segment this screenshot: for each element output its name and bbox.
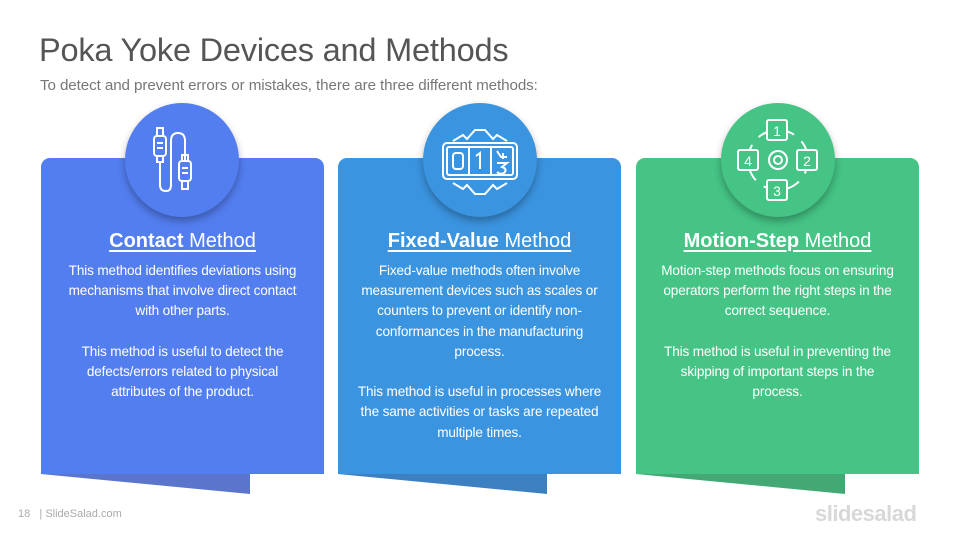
panel: motion-step method [636,158,919,474]
text: motion-step: Motion-step methods focus on ensuring operators perform the right steps in the correct sequence. [661,263,894,318]
panel: contact method [41,158,324,474]
fold: motion-step [636,474,845,494]
title: Poka Yoke Devices and Methods [39,32,508,68]
subtitle: To detect and prevent errors or mistakes, there are three different methods: [40,77,538,94]
footer: 18 | SlideSalad.com [18,508,122,520]
text: motion-step: This method is useful in preventing the skipping of important steps in the process. [664,344,891,399]
text: motion-step: Motion-Step Method [684,230,871,252]
text: contact [68,230,296,399]
icon: steps cycle: 2 [803,153,811,169]
icon: steps cycle: 3 [773,183,781,199]
icon: cable [125,103,239,217]
icon: steps cycle [721,103,835,217]
text: contact: This method identifies deviations using mechanisms that involve direct contact with other parts. [69,263,296,318]
icon: steps cycle: 4 [744,153,752,169]
fold: contact [41,474,250,494]
icon: steps cycle: 1 [773,123,781,139]
text: fixed-value: This method is useful in processes where the same activities or tasks are repeated multiple times. [358,384,601,440]
fold: fixed-value [338,474,547,494]
text: fixed-value: Fixed-value methods often involve measurement devices such as scales or counters to prevent or identify non-conformances in the manufacturing process. [361,263,598,359]
text: fixed-value: Fixed-Value Method [388,230,571,252]
text: fixed-value [358,230,601,440]
icon: counter [423,103,537,217]
text: contact: Contact Method [109,230,256,252]
logo: slidesalad [815,501,916,526]
text: motion-step [661,230,894,399]
panel: fixed-value method [338,158,621,474]
text: contact: This method is useful to detect the defects/errors related to physical attributes of the product. [82,344,283,399]
